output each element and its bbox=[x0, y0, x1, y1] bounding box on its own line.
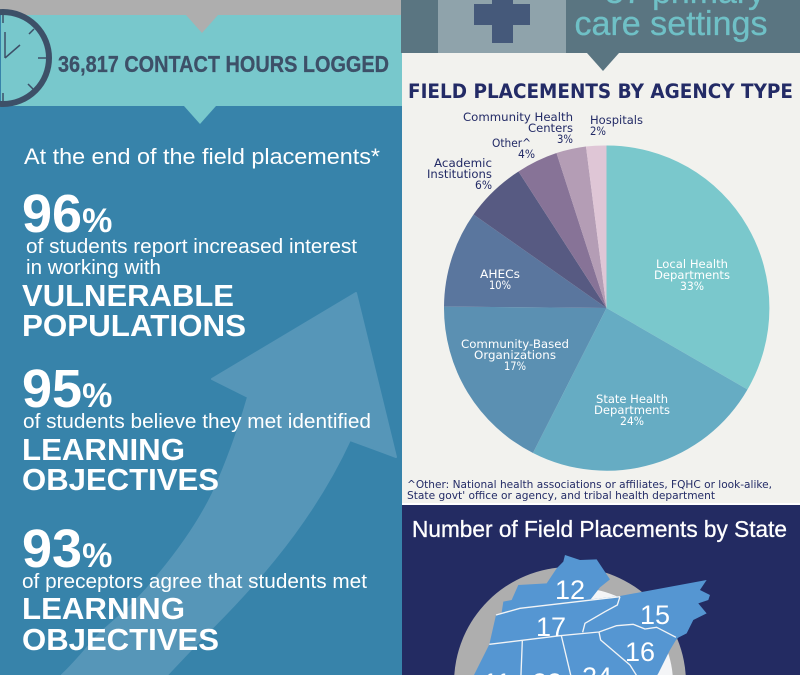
labels: state counts: 15 bbox=[640, 600, 670, 630]
pointer: grey notch bbox=[186, 15, 218, 33]
label: other bbox=[492, 136, 535, 161]
stat: 96 percent vulnerable populations: in working with bbox=[26, 257, 161, 279]
stat: 96 percent vulnerable populations bbox=[22, 184, 357, 343]
stat: 96 percent vulnerable populations: 96% bbox=[22, 184, 112, 244]
panel: field placements by agency type bbox=[402, 53, 800, 503]
labels: state counts bbox=[483, 575, 670, 675]
label: state health departments bbox=[594, 392, 670, 428]
heading: end of field placements: At the end of the field placements* bbox=[24, 144, 380, 169]
label: AHECs: AHECs bbox=[480, 267, 520, 281]
footnote: other definition bbox=[407, 478, 772, 502]
footnote: other definition: State govt' office or agency, and tribal health department bbox=[407, 489, 716, 502]
map: southeastern states bbox=[467, 555, 710, 675]
text: primary care settings: care settings bbox=[574, 5, 768, 43]
stat: 93 percent preceptors agree: 93% bbox=[22, 519, 112, 579]
band: primary care settings bbox=[401, 0, 800, 53]
footnote: other definition: ^Other: National health associations or affiliates, FQHC or look-alike, bbox=[407, 478, 772, 491]
label: local health departments: 33% bbox=[680, 279, 704, 293]
panel: left outcomes column bbox=[0, 0, 402, 675]
label: academic institutions: Academic bbox=[434, 156, 492, 170]
label: hospitals: Hospitals bbox=[590, 113, 643, 127]
label: AHECs bbox=[480, 267, 520, 292]
icon: medical cross tile bbox=[438, 0, 566, 53]
heading: number of field placements by state: Number of Field Placements by State bbox=[412, 516, 787, 542]
labels: state counts: 16 bbox=[625, 637, 655, 667]
label: local health departments bbox=[654, 257, 730, 293]
label: hospitals: 2% bbox=[590, 124, 606, 138]
label: community-based organizations bbox=[461, 337, 569, 373]
stat: 95 percent learning objectives: 95% bbox=[22, 359, 112, 419]
pointer: teal notch bbox=[184, 106, 216, 124]
label: hospitals bbox=[590, 113, 643, 138]
band: contact hours bbox=[0, 12, 402, 124]
label: state health departments: Departments bbox=[594, 403, 670, 417]
stat: 96 percent vulnerable populations: VULNERABLE bbox=[22, 278, 234, 313]
stat: 93 percent preceptors agree: LEARNING bbox=[22, 591, 185, 626]
label: academic institutions bbox=[427, 156, 492, 192]
icon: clock bbox=[0, 12, 49, 104]
label: community-based organizations: Community-Based bbox=[461, 337, 569, 351]
label: academic institutions: 6% bbox=[475, 178, 492, 192]
band: top grey strip bbox=[0, 0, 402, 15]
label: local health departments: Departments bbox=[654, 268, 730, 282]
panel: field placements by state bbox=[402, 505, 800, 675]
stat: 95 percent learning objectives: OBJECTIVES bbox=[22, 462, 219, 497]
label: community health centers bbox=[463, 110, 573, 146]
stat: 95 percent learning objectives: LEARNING bbox=[22, 432, 185, 467]
label: other: 4% bbox=[518, 147, 535, 161]
label: academic institutions: Institutions bbox=[427, 167, 492, 181]
label: state health departments: State Health bbox=[596, 392, 668, 406]
stat: 93 percent preceptors agree: OBJECTIVES bbox=[22, 622, 219, 657]
label: community health centers: Centers bbox=[528, 121, 573, 135]
stat: 93 percent preceptors agree: of preceptors agree that students met bbox=[22, 571, 367, 593]
arrow: rising background arrow bbox=[62, 293, 396, 675]
stat: 95 percent learning objectives bbox=[22, 359, 371, 497]
stat: 95 percent learning objectives: of students believe they met identified bbox=[23, 411, 371, 433]
label: other: Other^ bbox=[492, 136, 531, 150]
stat: 96 percent vulnerable populations: of students report increased interest bbox=[26, 236, 357, 258]
pointer: band notch bbox=[587, 53, 619, 71]
label: community-based organizations: 17% bbox=[504, 359, 526, 373]
stat: 96 percent vulnerable populations: POPULATIONS bbox=[22, 308, 246, 343]
labels: state counts: 12 bbox=[555, 575, 585, 605]
label: community health centers: 3% bbox=[557, 132, 573, 146]
labels: state counts: 17 bbox=[536, 612, 566, 642]
label: local health departments: Local Health bbox=[656, 257, 728, 271]
label: state health departments: 24% bbox=[620, 414, 644, 428]
stat: 93 percent preceptors agree bbox=[22, 519, 367, 657]
label: AHECs: 10% bbox=[489, 278, 511, 292]
stat: contact hours logged: 36,817 CONTACT HOURS LOGGED bbox=[58, 51, 389, 77]
label: community health centers: Community Health bbox=[463, 110, 573, 124]
label: community-based organizations: Organizations bbox=[474, 348, 556, 362]
pie chart: agency types bbox=[444, 145, 769, 471]
chart: ring behind map bbox=[454, 567, 686, 675]
